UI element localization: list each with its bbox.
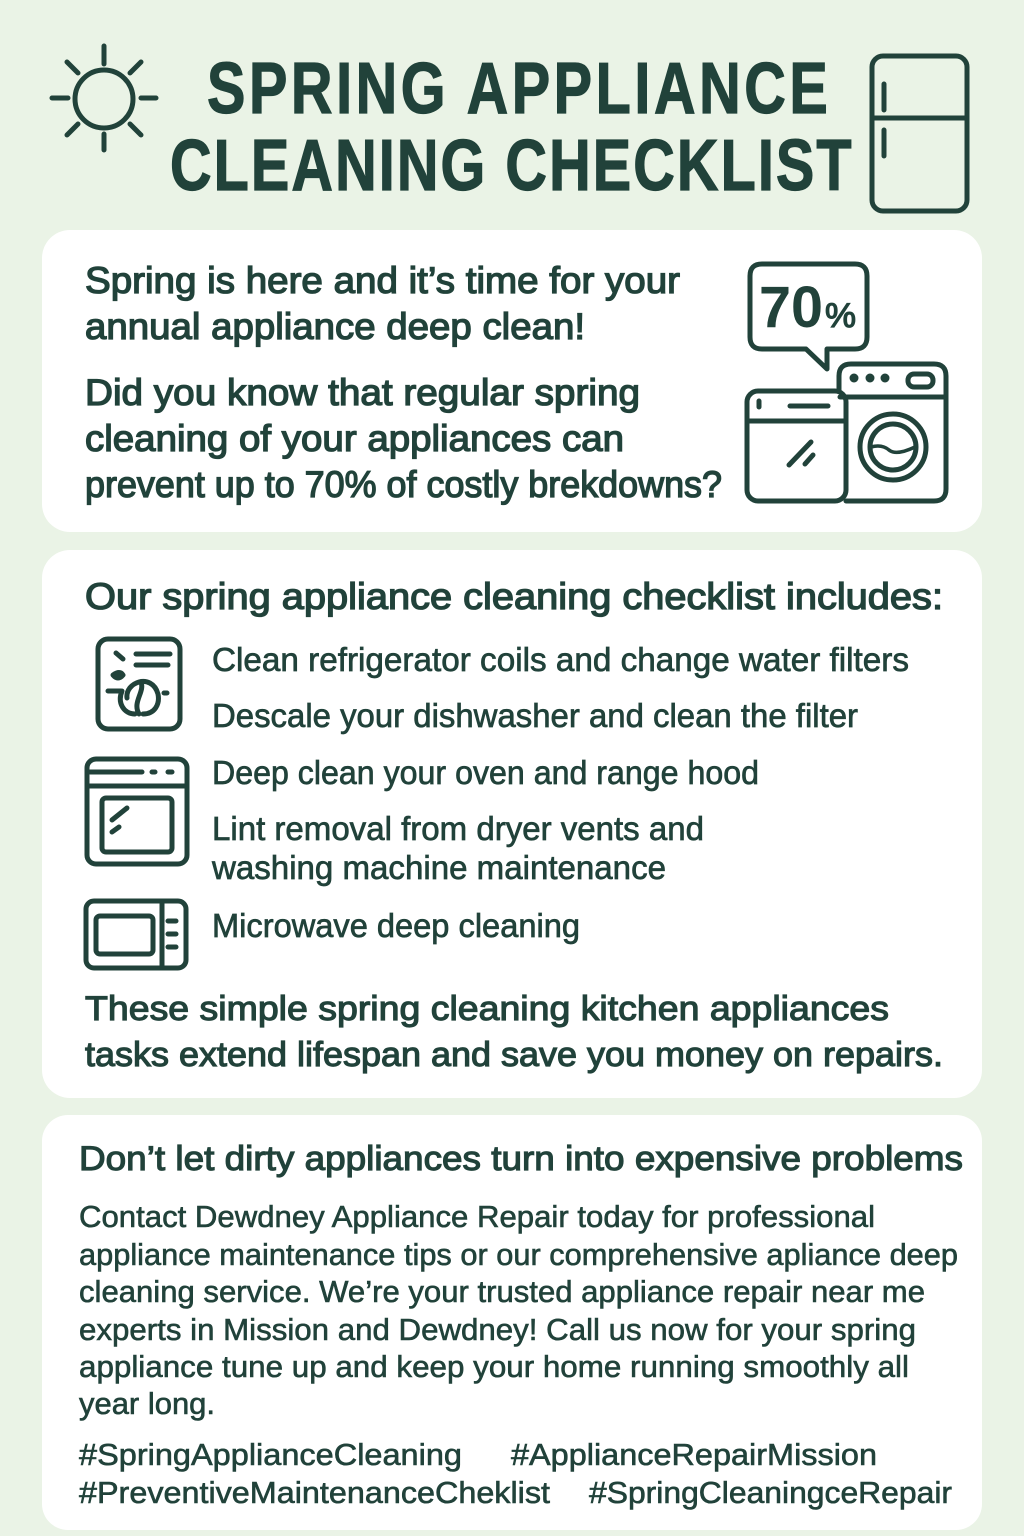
- title: [170, 48, 852, 205]
- icon: 70% speech bubble: [750, 264, 867, 369]
- hashtags: #ApplianceRepairMission: [511, 1438, 877, 1472]
- cta heading: Don’t let dirty appliances turn into expensive problems: [79, 1140, 963, 1178]
- intro text: Did you know that regular spring: [85, 372, 640, 413]
- icon: refrigerator: [872, 56, 967, 211]
- panel: checklist: [42, 550, 982, 1098]
- icon: oven: [87, 759, 187, 864]
- icon: 70% speech bubble: %: [825, 297, 856, 335]
- checklist items: Clean refrigerator coils and change water filters: [212, 641, 909, 678]
- intro text: prevent up to 70% of costly brekdowns?: [85, 464, 722, 505]
- checklist items: Descale your dishwasher and clean the filter: [212, 697, 858, 734]
- icon: dishwasher panel: [98, 639, 180, 729]
- cta paragraph: cleaning service. We’re your trusted appliance repair near me: [79, 1275, 925, 1309]
- icon: 70% speech bubble: 70: [759, 275, 823, 340]
- hashtags: #SpringCleaningceRepair: [589, 1476, 952, 1510]
- cta paragraph: year long.: [79, 1387, 215, 1421]
- panel: call to action: [42, 1115, 982, 1530]
- intro text: Spring is here and it’s time for your: [85, 260, 680, 301]
- checklist summary: [85, 990, 943, 1074]
- title: SPRING APPLIANCE: [207, 48, 828, 128]
- intro text: annual appliance deep clean!: [85, 306, 585, 347]
- icon: dishwasher: [747, 391, 846, 501]
- hashtags: [79, 1438, 952, 1510]
- cta paragraph: appliance tune up and keep your home running smoothly all: [79, 1350, 909, 1384]
- cta paragraph: Contact Dewdney Appliance Repair today for professional: [79, 1200, 875, 1234]
- checklist items: Deep clean your oven and range hood: [212, 754, 759, 791]
- cta paragraph: [79, 1200, 958, 1421]
- icon: washing machine: [839, 364, 946, 501]
- checklist items: Lint removal from dryer vents and: [212, 810, 704, 847]
- hashtags: #PreventiveMaintenanceCheklist: [79, 1476, 551, 1510]
- checklist items: [211, 641, 909, 944]
- intro text: cleaning of your appliances can: [85, 418, 624, 459]
- cta paragraph: appliance maintenance tips or our comprehensive apliance deep: [79, 1238, 958, 1272]
- checklist items: Microwave deep cleaning: [212, 907, 580, 944]
- checklist summary: These simple spring cleaning kitchen appliances: [85, 990, 889, 1028]
- panel: intro: [42, 230, 982, 532]
- icon: microwave: [86, 901, 186, 968]
- checklist heading: Our spring appliance cleaning checklist includes:: [85, 576, 943, 617]
- hashtags: #SpringApplianceCleaning: [79, 1438, 462, 1472]
- icon: sun: [52, 46, 156, 150]
- cta paragraph: experts in Mission and Dewdney! Call us now for your spring: [79, 1313, 916, 1347]
- checklist items: washing machine maintenance: [211, 849, 666, 886]
- intro text: [85, 260, 722, 505]
- checklist summary: tasks extend lifespan and save you money on repairs.: [85, 1036, 943, 1074]
- title: CLEANING CHECKLIST: [170, 125, 852, 205]
